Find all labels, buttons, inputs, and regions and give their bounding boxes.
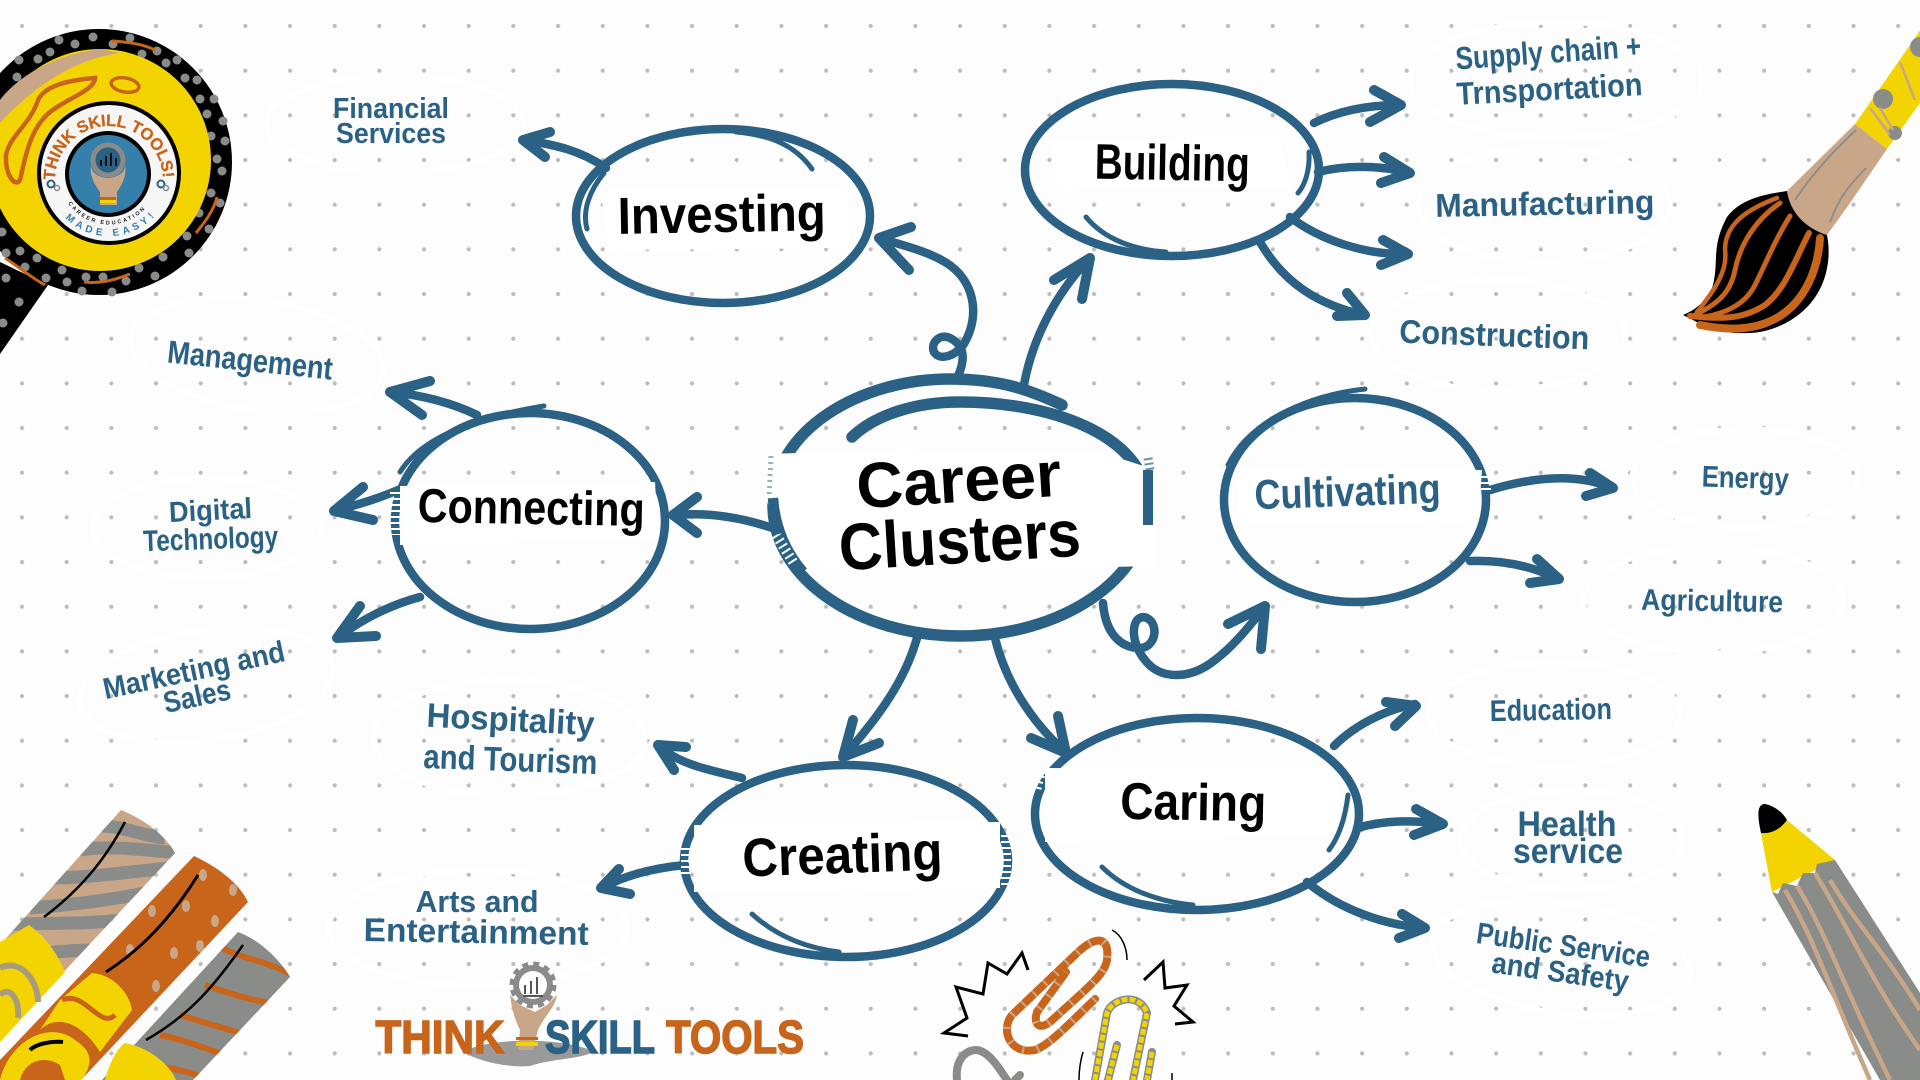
label: Education: [1428, 662, 1680, 766]
arrow: center to investing with loop: [879, 227, 973, 376]
arrow: connecting to digital technology: [334, 487, 398, 520]
arrow: cultivating to energy: [1490, 473, 1613, 496]
label: Hospitality and Tourism: Hospitality: [426, 697, 596, 743]
arrow: building to third branch: [1290, 217, 1408, 265]
icon: paint brush: [1683, 30, 1920, 333]
bubble: Building: [1025, 84, 1319, 256]
label: Supply chain + Trnsportation: Supply chain +: [1454, 28, 1642, 76]
label: Public Service and Safety: Public Service: [1474, 917, 1652, 974]
arrow: cultivating to agriculture: [1470, 559, 1559, 583]
label: Public Service and Safety: and Safety: [1490, 947, 1631, 999]
label: Digital Technology: Technology: [143, 521, 279, 558]
label: Health service: Health: [1518, 805, 1616, 844]
arrow: center to connecting: [673, 497, 778, 533]
label: Health service: service: [1513, 832, 1623, 871]
label: Financial Services: Services: [336, 118, 446, 150]
arrow: caring to public service: [1307, 882, 1425, 938]
arrow: center to cultivating with loop: [1103, 603, 1265, 675]
label: Marketing and Sales: [72, 613, 340, 757]
icon: decorated rolls: [0, 810, 292, 1080]
label: Arts and Entertainment: Entertainment: [363, 911, 589, 952]
label: Energy: Energy: [1701, 460, 1790, 497]
label: Construction: Construction: [1399, 313, 1590, 356]
arrow: center to building: [1024, 258, 1090, 385]
label: Manufacturing: [1418, 148, 1670, 262]
central bubble: Career Clusters: Clusters: [837, 496, 1083, 584]
bubble: Investing: [576, 129, 870, 303]
icon: magnifying glass with badge: MADE EASY!: [66, 212, 154, 236]
label: Marketing and Sales: Sales: [160, 673, 234, 720]
logo: Think Skill Tools: SKILL: [545, 1011, 655, 1063]
central bubble: Career Clusters: Career: [854, 438, 1063, 522]
label: Public Service and Safety: [1426, 885, 1698, 1031]
bubble: Creating: Creating: [741, 822, 943, 888]
bubble: Cultivating: [1224, 389, 1486, 602]
label: Hospitality and Tourism: [373, 680, 645, 796]
arrow: connecting to marketing: [337, 597, 420, 638]
central bubble: Career Clusters: [766, 379, 1156, 636]
label: Arts and Entertainment: [329, 870, 627, 986]
label: Digital Technology: Digital: [168, 493, 253, 529]
label: Marketing and Sales: Marketing and: [100, 635, 288, 706]
arrow: investing to financial services: [523, 132, 606, 168]
label: Health service: [1460, 790, 1682, 890]
label: Agriculture: Agriculture: [1641, 584, 1783, 619]
label: Management: [124, 283, 390, 427]
label: Hospitality and Tourism: and Tourism: [423, 738, 598, 782]
arrow: caring to education: [1334, 702, 1416, 746]
label: Financial Services: [267, 75, 523, 173]
label: Management: Management: [166, 333, 335, 387]
label: Digital Technology: [93, 478, 321, 578]
arrow: creating to hospitality: [658, 745, 742, 778]
icon: paper clips with bursts: [944, 930, 1193, 1080]
label: Construction: [1371, 280, 1625, 390]
label: Financial Services: Financial: [333, 93, 449, 125]
label: Manufacturing: Manufacturing: [1435, 183, 1655, 224]
bubble: Caring: Caring: [1120, 773, 1267, 833]
label: Education: Education: [1490, 693, 1612, 728]
bubble: Caring: [1035, 718, 1359, 910]
arrow: building to manufacturing: [1318, 157, 1410, 183]
bubble: Connecting: [395, 406, 665, 629]
label: Supply chain + Trnsportation: Trnsportation: [1456, 66, 1643, 112]
bubble: Building: Building: [1094, 134, 1250, 192]
icon: magnifying glass with badge: THINK SKILL TOOLS!: [43, 114, 174, 180]
icon: pencil: [1758, 804, 1920, 1080]
logo: Think Skill Tools: TOOLS: [666, 1011, 804, 1063]
bubble: Creating: [684, 765, 1008, 957]
bubble: Investing: Investing: [617, 184, 826, 246]
logo: Think Skill Tools: [376, 964, 804, 1066]
arrow: center to creating: [843, 638, 917, 757]
icon: magnifying glass with badge: [0, 29, 232, 354]
logo: Think Skill Tools: THINK: [376, 1011, 504, 1063]
bubble: Cultivating: Cultivating: [1254, 465, 1441, 518]
label: Supply chain + Trnsportation: [1410, 22, 1702, 138]
label: Arts and Entertainment: Arts and: [416, 884, 538, 919]
arrow: caring to health service: [1357, 809, 1443, 835]
arrow: connecting to management: [390, 381, 477, 415]
arrow: building to construction: [1260, 242, 1365, 316]
arrow: center to caring: [995, 638, 1066, 753]
arrow: creating to arts: [601, 865, 685, 894]
icon: magnifying glass with badge: CAREER EDUCATION: [68, 202, 144, 224]
arrow: building to supply chain: [1314, 90, 1401, 123]
bubble: Connecting: Connecting: [417, 480, 645, 537]
label: Energy: [1632, 429, 1858, 527]
label: Agriculture: [1583, 547, 1843, 653]
